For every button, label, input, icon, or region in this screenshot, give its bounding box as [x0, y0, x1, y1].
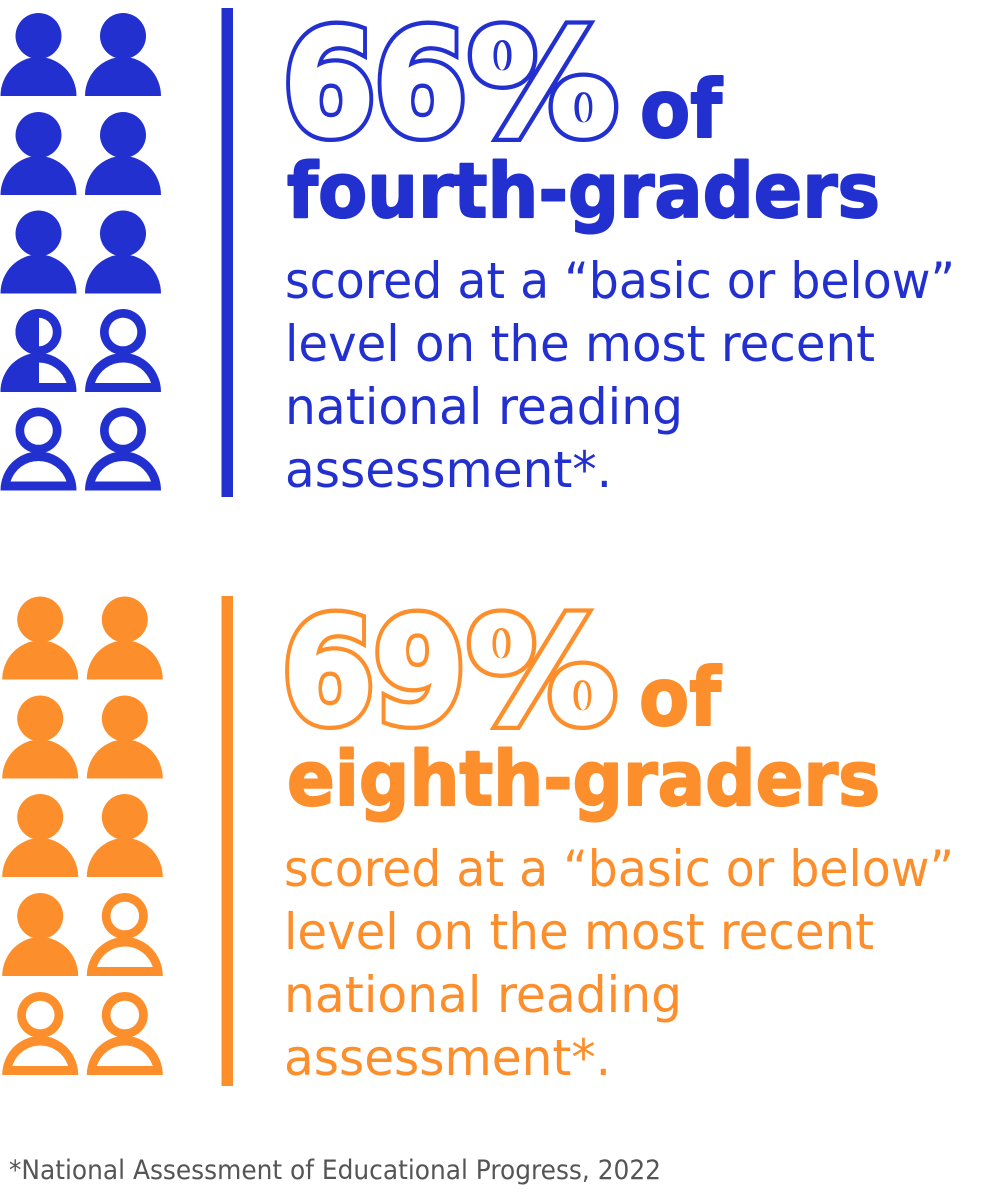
statistic: 69%: 69	[282, 588, 465, 757]
body text: eighth-graders description: level on the most recent	[284, 903, 874, 961]
body text: eighth-graders description: scored at a “basic or below”	[284, 840, 954, 898]
body text: fourth-graders description	[285, 252, 955, 499]
panel: fourth-graders	[0, 0, 955, 499]
heading: of: of	[640, 63, 723, 156]
body text: fourth-graders description: level on the most recent	[285, 315, 875, 373]
footnote: *National Assessment of Educational Progress, 2022	[9, 1155, 661, 1186]
panel: eighth-graders	[2, 588, 954, 1087]
statistic: 66%: %	[469, 0, 617, 169]
statistic: 66%: 66	[283, 0, 466, 169]
divider bar: orange	[222, 596, 233, 1086]
icon grid: fourth-graders 66%	[0, 13, 161, 490]
heading: fourth-graders: fourth-graders	[287, 146, 880, 235]
heading: of: of	[639, 651, 722, 744]
body text: fourth-graders description: national reading	[285, 378, 683, 436]
statistic: 69%	[282, 588, 616, 757]
divider bar: blue	[222, 8, 233, 497]
statistic: 66%: %	[469, 0, 617, 169]
icon grid: eighth-graders 69%	[2, 596, 163, 1075]
body text: eighth-graders description	[284, 840, 954, 1087]
statistic: 69%: 69	[282, 588, 465, 757]
body text: fourth-graders description: scored at a “basic or below”	[285, 252, 955, 310]
body text: fourth-graders description: assessment*.	[285, 441, 612, 499]
body text: eighth-graders description: national reading	[284, 966, 682, 1024]
statistic: 69%: %	[468, 588, 616, 757]
body text: eighth-graders description: assessment*.	[284, 1029, 611, 1087]
heading: eighth-graders: eighth-graders	[287, 734, 880, 823]
statistic: 66%	[283, 0, 617, 169]
statistic: 69%: %	[468, 588, 616, 757]
statistic: 66%: 66	[283, 0, 466, 169]
